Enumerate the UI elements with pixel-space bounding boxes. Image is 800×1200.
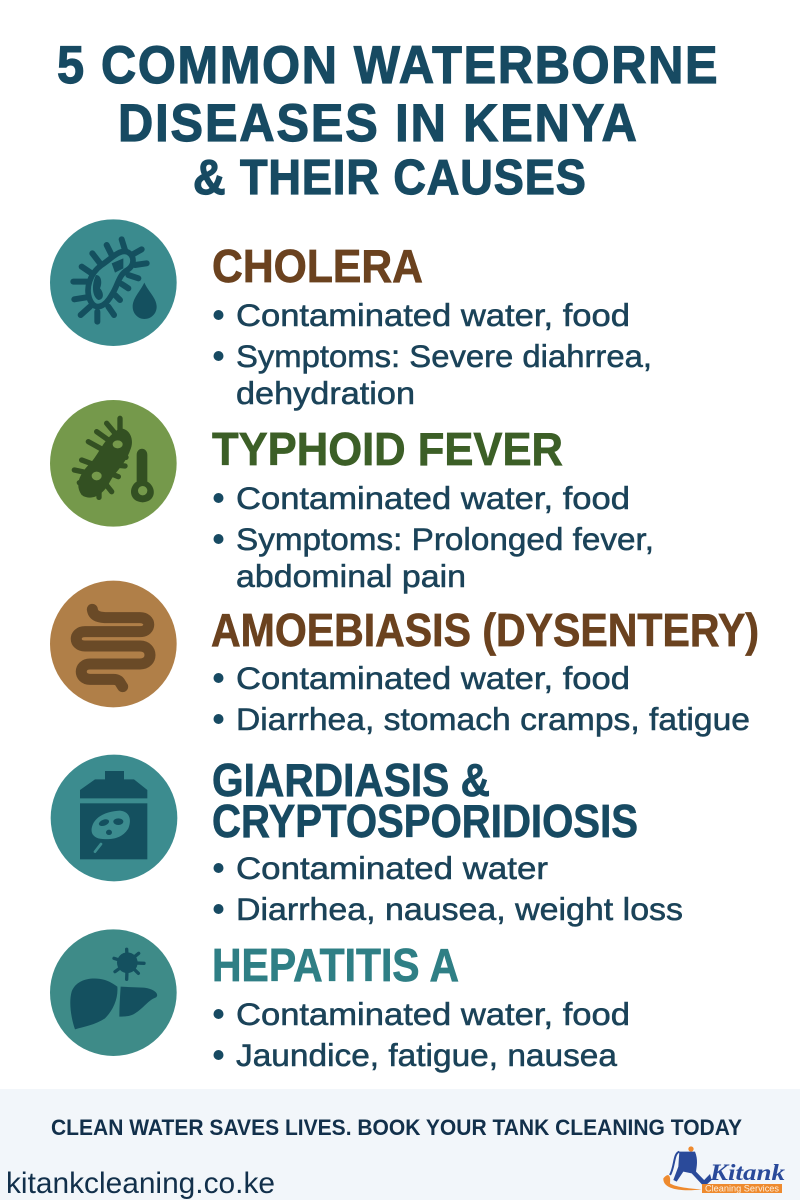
bullets: cholera <box>214 297 652 411</box>
title <box>57 35 718 204</box>
title: DISEASES IN KENYA <box>118 93 637 152</box>
panel: cholera <box>50 219 652 411</box>
call to action: CLEAN WATER SAVES LIVES. BOOK YOUR TANK CLEANING TODAY <box>51 1115 742 1140</box>
bullets: hepatitis a: Contaminated water, food <box>236 996 630 1032</box>
bullets: cholera: Symptoms: Severe diahrrea, <box>236 338 652 374</box>
panel: giardiasis and cryptosporidiosis <box>51 754 683 927</box>
heading: giardiasis and cryptosporidiosis <box>212 754 638 847</box>
bullets: hepatitis a: Jaundice, fatigue, nausea <box>236 1037 617 1073</box>
panel: hepatitis a <box>50 929 630 1073</box>
bullets: giardiasis and cryptosporidiosis: Diarrhea, nausea, weight loss <box>236 891 683 927</box>
logo: kitank cleaning services: Cleaning Services <box>705 1184 779 1194</box>
icon: liver and virus <box>50 929 177 1056</box>
bullets: typhoid fever: Contaminated water, food <box>236 480 630 516</box>
logo: kitank cleaning services <box>663 1146 786 1194</box>
icon: bacterium and thermometer <box>50 400 177 527</box>
icon: intestine <box>50 581 177 707</box>
logo: kitank cleaning services: Kitank <box>709 1160 786 1185</box>
bullets: cholera: Contaminated water, food <box>236 297 630 333</box>
bullets: giardiasis and cryptosporidiosis: Contaminated water <box>236 850 548 886</box>
heading: giardiasis and cryptosporidiosis: CRYPTOSPORIDIOSIS <box>212 795 638 847</box>
heading: hepatitis a: HEPATITIS A <box>212 939 459 991</box>
title: & THEIR CAUSES <box>193 149 586 204</box>
bullets: amoebiasis <box>214 660 750 737</box>
bullets: hepatitis a <box>214 996 630 1073</box>
title: 5 COMMON WATERBORNE <box>57 35 718 94</box>
footer banner <box>0 1089 800 1200</box>
heading: typhoid fever: TYPHOID FEVER <box>212 423 563 475</box>
icon: water tank with parasite <box>51 755 177 881</box>
bullets: giardiasis and cryptosporidiosis <box>214 850 683 927</box>
bullets: typhoid fever: abdominal pain <box>236 558 466 594</box>
panel: typhoid fever <box>50 400 654 594</box>
icon: bacterium and water drop <box>50 219 177 346</box>
panel: amoebiasis <box>50 581 759 737</box>
website: kitankcleaning.co.ke <box>6 1167 275 1200</box>
heading: giardiasis and cryptosporidiosis: GIARDIASIS & <box>212 754 490 806</box>
heading: cholera: CHOLERA <box>212 240 423 292</box>
bullets: typhoid fever: Symptoms: Prolonged fever, <box>236 521 654 557</box>
bullets: amoebiasis: Contaminated water, food <box>236 660 630 696</box>
bullets: typhoid fever <box>214 480 654 594</box>
bullets: cholera: dehydration <box>236 375 415 411</box>
bullets: amoebiasis: Diarrhea, stomach cramps, fatigue <box>236 701 750 737</box>
